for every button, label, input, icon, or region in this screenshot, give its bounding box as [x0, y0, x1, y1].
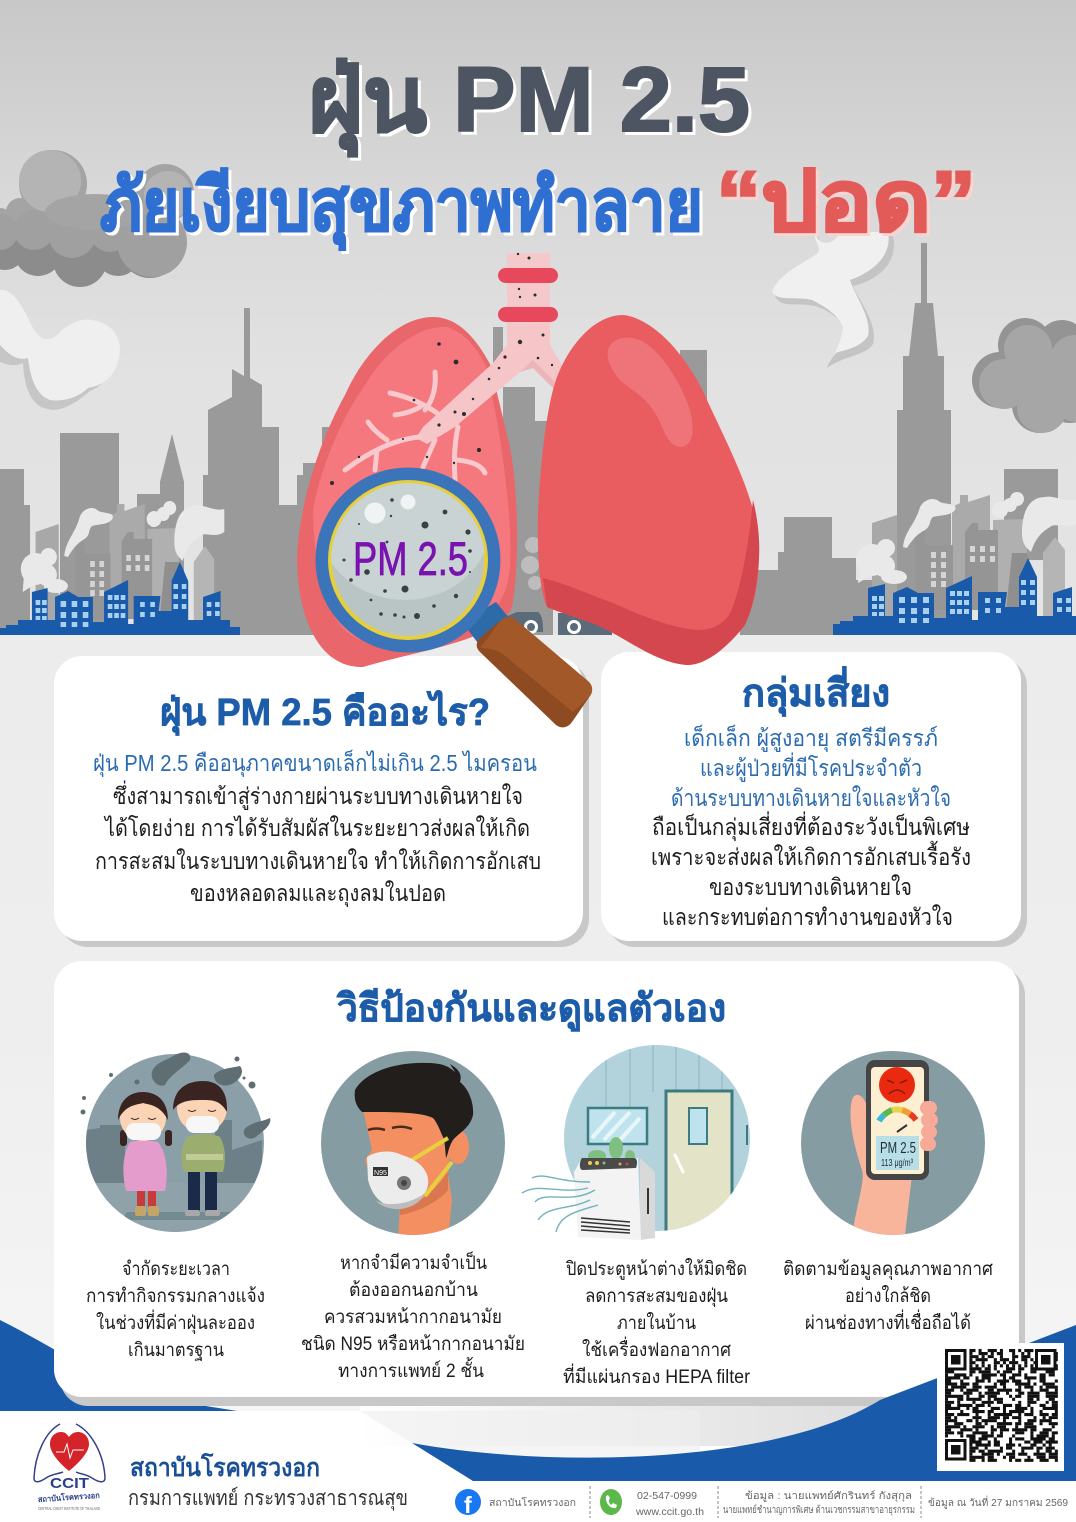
caption 2: ควรสวมหน้ากากอนามัย: [324, 1307, 502, 1328]
phone and website contact: www.ccit.go.th: [635, 1507, 704, 1518]
heading: วิธีป้องกันและดูแลตัวเอง: [336, 988, 726, 1032]
caption 1: การทำกิจกรรมกลางแจ้ง: [86, 1286, 265, 1307]
left lung: [297, 317, 517, 667]
city silhouette left: [0, 308, 300, 635]
logo: CCIT: สถาบันโรคทรวงอก: [38, 1490, 100, 1504]
phone and website contact: [600, 1489, 704, 1518]
boy: [173, 1081, 227, 1216]
logo: CCIT: CENTRAL CHEST INSTITUTE OF THAILAND: [38, 1506, 100, 1511]
blue swoosh right: [900, 1325, 1076, 1420]
phone and website contact: 02-547-0999: [637, 1491, 697, 1502]
lungs illustration: [297, 253, 759, 727]
data source credit: นายแพทย์ชำนาญการพิเศษ ด้านเวชกรรมสาขาอายุรกรรม: [723, 1504, 915, 1516]
description text: ด้านระบบทางเดินหายใจและหัวใจ: [671, 785, 951, 811]
icon: phone showing PM 2.5: 113 μg/m³: [881, 1157, 913, 1169]
caption 4: [783, 1259, 993, 1334]
description text: เด็กเล็ก ผู้สูงอายุ สตรีมีครรภ์: [684, 723, 938, 752]
icon: man with N95 mask: [321, 1051, 505, 1240]
background: grey sky: [0, 0, 1076, 636]
blue skyline left: [0, 562, 240, 639]
description text: การสะสมในระบบทางเดินหายใจ ทำให้เกิดการอักเสบ: [95, 848, 541, 874]
blue swoosh left: [0, 1320, 237, 1411]
girl: [118, 1092, 172, 1216]
panel: what is PM 2.5: [54, 656, 589, 947]
caption 4: ผ่านช่องทางที่เชื่อถือได้: [805, 1309, 971, 1334]
road strip: [0, 635, 1076, 660]
caption 1: ในช่วงที่มีค่าฝุ่นละออง: [96, 1309, 255, 1335]
white smoke left: [0, 290, 120, 410]
soot particles in airway: [330, 253, 553, 485]
cars behind lungs: [505, 537, 612, 635]
blue skyline right: [833, 558, 1076, 635]
caption 3: ภายในบ้าน: [617, 1312, 696, 1334]
description text: ซึ่งสามารถเข้าสู่ร่างกายผ่านระบบทางเดินหายใจ: [113, 780, 523, 810]
description text: [93, 748, 541, 907]
icon: children wearing masks: [80, 1053, 270, 1233]
caption 3: [563, 1258, 751, 1388]
right lung: [538, 315, 759, 665]
organisation name: กรมการแพทย์ กระทรวงสาธารณสุข: [128, 1486, 408, 1511]
caption 2: ชนิด N95 หรือหน้ากากอนามัย: [301, 1334, 525, 1355]
data date: ข้อมูล ณ วันที่ 27 มกราคม 2569: [928, 1495, 1068, 1509]
organisation name: สถาบันโรคทรวงอก: [130, 1452, 320, 1482]
icon: phone showing PM 2.5: [801, 1051, 985, 1235]
description text: และผู้ป่วยที่มีโรคประจำตัว: [700, 752, 922, 782]
facebook contact: [455, 1489, 576, 1518]
magnifying glass: PM 2.5: [353, 532, 468, 585]
caption 3: ปิดประตูหน้าต่างให้มิดชิด: [565, 1258, 747, 1280]
caption 3: ลดการสะสมของฝุ่น: [585, 1286, 728, 1308]
subtitle highlight: lungs: “ปอด”: [716, 154, 976, 248]
footer shapes: [0, 1325, 1076, 1522]
panel: risk groups: [601, 652, 1027, 947]
description text: เพราะจะส่งผลให้เกิดการอักเสบเรื้อรัง: [651, 841, 971, 870]
caption 3: ที่มีแผ่นกรอง HEPA filter: [563, 1363, 751, 1388]
magnifying glass: [316, 450, 592, 727]
caption 1: เกินมาตรฐาน: [128, 1340, 224, 1361]
heading: ฝุ่น PM 2.5 คืออะไร?: [160, 690, 490, 736]
building cluster left: [21, 501, 224, 634]
description text: ของระบบทางเดินหายใจ: [709, 874, 912, 900]
caption 4: อย่างใกล้ชิด: [845, 1285, 931, 1307]
caption 1: [86, 1259, 265, 1361]
description text: [651, 723, 971, 930]
description text: ได้โดยง่าย การได้รับสัมผัสในระยะยาวส่งผลให้เกิด: [103, 815, 530, 841]
grey cloud right: [972, 318, 1076, 433]
city silhouette centre and right: [280, 243, 1058, 635]
data source credit: ข้อมูล : นายแพทย์ศักรินทร์ กังสุกุล: [745, 1490, 912, 1502]
trachea and bronchi: [416, 253, 565, 444]
QR code: [937, 1343, 1064, 1471]
heading: กลุ่มเสี่ยง: [742, 666, 890, 717]
caption 2: ทางการแพทย์ 2 ชั้น: [338, 1357, 484, 1382]
grey cloud top left: [0, 150, 194, 287]
description text: ฝุ่น PM 2.5 คืออนุภาคขนาดเล็กไม่เกิน 2.5 ไมครอน: [93, 748, 537, 777]
facebook contact: สถาบันโรคทรวงอก: [489, 1496, 576, 1509]
white smoke right: [772, 232, 894, 368]
data source credit: [723, 1490, 915, 1516]
caption 2: [301, 1250, 525, 1382]
icon: man with N95 mask: N95: [374, 1168, 387, 1177]
caption 3: ใช้เครื่องฟอกอากาศ: [582, 1336, 731, 1361]
title: PM 2.5: ฝุ่น PM 2.5: [308, 49, 750, 157]
icon: air purifier in closed room: [522, 1045, 750, 1240]
background: lower pale area: [0, 635, 1076, 1415]
caption 4: ติดตามข้อมูลคุณภาพอากาศ: [783, 1259, 993, 1281]
caption 1: จำกัดระยะเวลา: [122, 1259, 230, 1280]
organisation name: [128, 1452, 408, 1511]
description text: ถือเป็นกลุ่มเสี่ยงที่ต้องระวังเป็นพิเศษ: [652, 811, 970, 841]
subtitle: ภัยเงียบสุขภาพทำลาย: [100, 166, 703, 251]
description text: ของหลอดลมและถุงลมในปอด: [190, 880, 446, 907]
description text: และกระทบต่อการทำงานของหัวใจ: [662, 904, 953, 930]
icon: phone showing PM 2.5: PM 2.5: [880, 1140, 916, 1157]
logo: CCIT: [34, 1424, 105, 1511]
logo: CCIT: CCIT: [50, 1475, 89, 1492]
facebook contact: f: [464, 1492, 472, 1518]
caption 2: หากจำมีความจำเป็น: [340, 1250, 487, 1274]
panel: prevention and self-care: [54, 961, 1025, 1406]
building cluster right: [856, 492, 1076, 625]
caption 2: ต้องออกนอกบ้าน: [349, 1280, 478, 1301]
